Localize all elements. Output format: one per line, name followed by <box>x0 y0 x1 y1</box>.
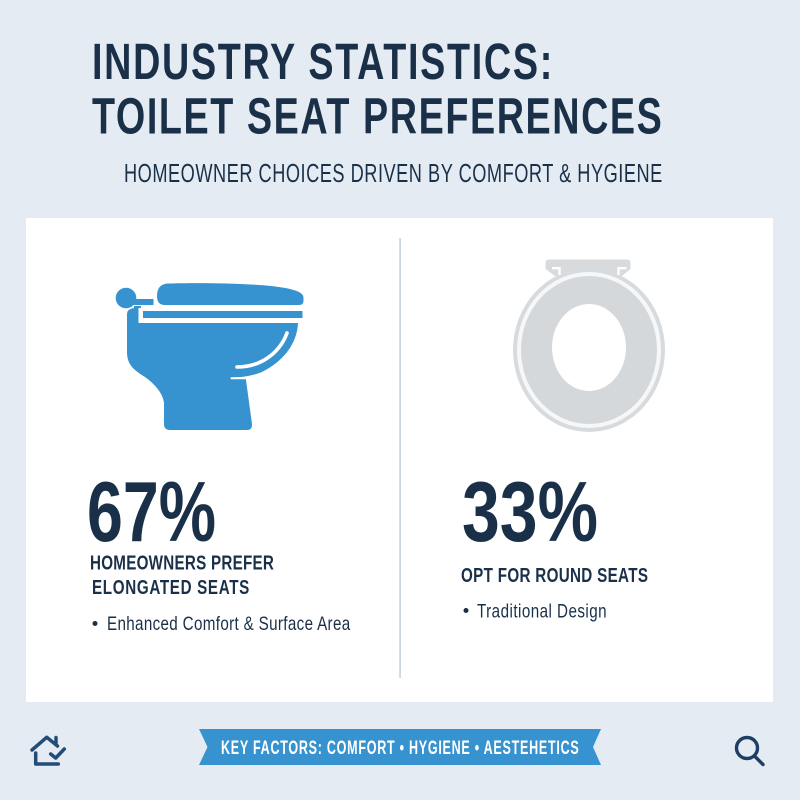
banner: key factors: KEY FACTORS: COMFORT • HYGIENE • AESTEHETICS <box>221 737 579 759</box>
label: homeowners prefer elongated seats: ELONGATED SEATS <box>92 576 249 599</box>
icon: round toilet seat <box>513 260 665 432</box>
icon: magnifying glass <box>736 738 763 764</box>
stat: 67%: 67% <box>87 465 216 560</box>
icon: house with check <box>32 737 64 764</box>
banner: key factors <box>199 729 601 765</box>
title: INDUSTRY STATISTICS: <box>92 32 552 90</box>
bullet: traditional design: Traditional Design <box>477 600 607 622</box>
icon: elongated toilet <box>116 283 304 430</box>
stat: 33%: 33% <box>462 465 598 560</box>
label: homeowners prefer elongated seats: HOMEOWNERS PREFER <box>90 551 274 574</box>
label: opt for round seats: OPT FOR ROUND SEATS <box>461 564 648 587</box>
label: homeowners prefer elongated seats <box>90 551 274 599</box>
title <box>92 32 662 145</box>
bullet: enhanced comfort: Enhanced Comfort & Surface Area <box>107 612 351 634</box>
subtitle: HOMEOWNER CHOICES DRIVEN BY COMFORT & HYGIENE <box>124 159 662 188</box>
panel: statistics <box>26 218 773 702</box>
title: TOILET SEAT PREFERENCES <box>92 87 662 145</box>
